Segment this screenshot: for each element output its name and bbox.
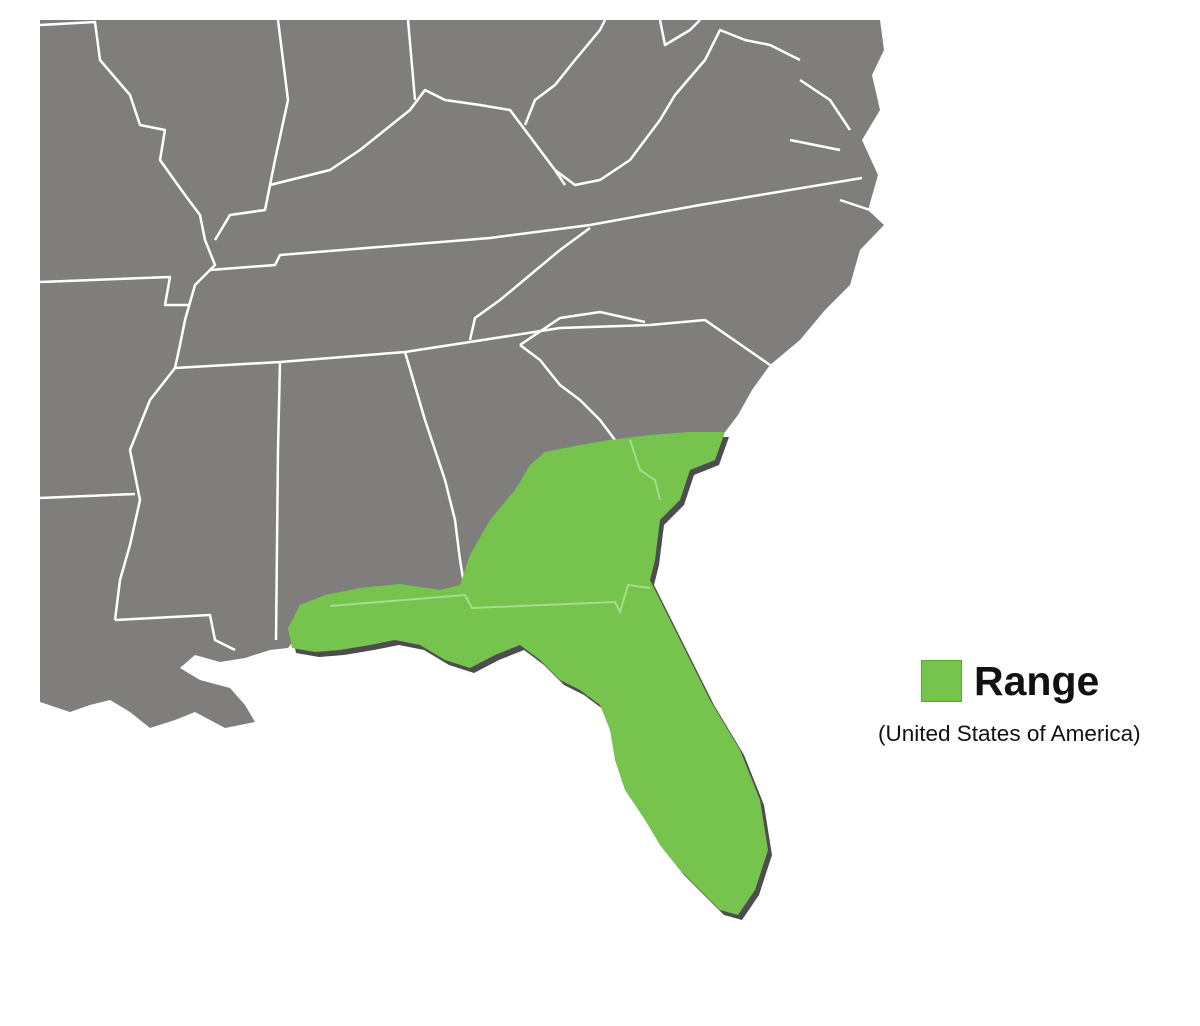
range area: green: [288, 432, 768, 915]
legend swatch: [921, 660, 962, 702]
legend: [878, 658, 1141, 746]
legend subtitle: (United States of America): [878, 721, 1141, 746]
gray landmass: southeastern states: [40, 20, 884, 728]
state borders: [40, 20, 870, 650]
range area: shadow: [292, 437, 772, 920]
legend label: Range: [974, 658, 1099, 704]
